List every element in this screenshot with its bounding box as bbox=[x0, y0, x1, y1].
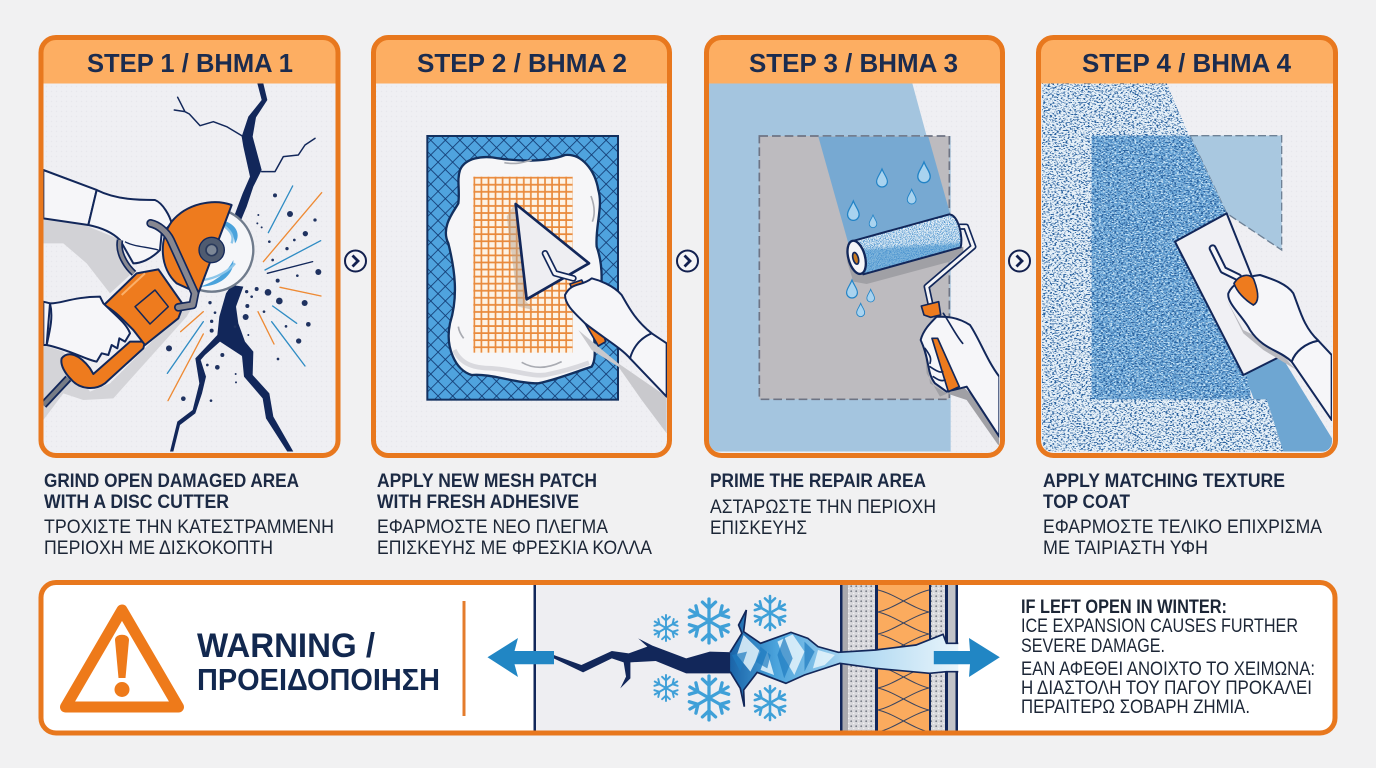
wall cross-section bbox=[840, 584, 958, 732]
caption: step 3 bbox=[710, 471, 936, 539]
caption: step 3: ΕΠΙΣΚΕΥΗΣ bbox=[710, 517, 807, 539]
hatched blue mesh patch bbox=[427, 136, 618, 400]
crack bbox=[170, 83, 315, 452]
step 3 heading: STEP 3 / BHMA 3 bbox=[749, 48, 958, 78]
caption: step 4: ΜΕ ΤΑΙΡΙΑΣΤΗ ΥΦΗ bbox=[1043, 537, 1208, 559]
warning heading: WARNING / bbox=[197, 627, 376, 665]
caption: step 2: APPLY NEW MESH PATCH bbox=[377, 471, 597, 492]
caption: step 1: ΠΕΡΙΟΧΗ ΜΕ ΔΙΣΚΟΚΟΠΤΗ bbox=[44, 537, 273, 559]
gloved hand and grip bbox=[921, 302, 999, 437]
white textured coat bbox=[1042, 83, 1283, 452]
grinder handle bbox=[61, 342, 145, 388]
arrow: step 1 to 2 bbox=[345, 250, 366, 272]
panel: warning bbox=[41, 582, 1335, 733]
panel: step 4 bbox=[1038, 38, 1336, 456]
arrow: step 2 to 3 bbox=[677, 250, 698, 272]
caption: step 3: ΑΣΤΑΡΩΣΤΕ ΤΗΝ ΠΕΡΙΟΧΗ bbox=[710, 496, 936, 518]
panel: step 2 bbox=[374, 38, 670, 456]
panel: step 3 bbox=[706, 38, 1002, 456]
step 4 frame bbox=[1038, 38, 1336, 456]
illustration: mesh patch and trowel bbox=[427, 136, 667, 433]
grinder body bbox=[104, 269, 183, 345]
step 1 heading: STEP 1 / BHMA 1 bbox=[87, 48, 293, 78]
panel: step 1 bbox=[41, 38, 338, 456]
sparks and debris bbox=[166, 186, 322, 402]
caption: step 1 bbox=[44, 471, 334, 559]
caption: step 4: ΕΦΑΡΜΟΣΤΕ ΤΕΛΙΚΟ ΕΠΙΧΡΙΣΜΑ bbox=[1043, 516, 1322, 538]
warning text bbox=[1021, 597, 1315, 718]
caption: step 1: WITH A DISC CUTTER bbox=[44, 492, 229, 513]
step 2 header bar bbox=[374, 38, 670, 84]
warning text: ΕΑΝ ΑΦΕΘΕΙ ΑΝΟΙΧΤΟ ΤΟ ΧΕΙΜΩΝΑ: bbox=[1021, 658, 1315, 680]
shadows bbox=[44, 220, 130, 294]
step 1 frame bbox=[41, 38, 338, 456]
step 2 heading: STEP 2 / BHMA 2 bbox=[417, 48, 627, 78]
frost diagram background bbox=[535, 584, 841, 732]
roller sleeve bbox=[844, 213, 963, 276]
adhesive blob bbox=[446, 155, 602, 383]
illustration: textured top coat with float bbox=[1042, 83, 1332, 452]
step 4 header bar bbox=[1038, 38, 1336, 84]
primer drops bbox=[847, 162, 930, 317]
grinder rear grip bbox=[120, 240, 134, 273]
icon: warning triangle bbox=[66, 610, 178, 707]
snowflakes bbox=[653, 596, 787, 720]
frozen crack bbox=[554, 610, 958, 707]
step 3 header bar bbox=[706, 38, 1002, 84]
caption: step 3: PRIME THE REPAIR AREA bbox=[710, 471, 926, 492]
arrow: step 3 to 4 bbox=[1009, 250, 1030, 272]
warning text: SEVERE DAMAGE. bbox=[1021, 635, 1165, 657]
gloved hand bbox=[565, 278, 667, 397]
upper hand bbox=[43, 170, 172, 263]
trowel bbox=[516, 204, 589, 299]
step 4 heading: STEP 4 / BHMA 4 bbox=[1082, 48, 1292, 78]
caption: step 4 bbox=[1043, 471, 1322, 559]
hand shadow bbox=[578, 330, 667, 433]
caption: step 2 bbox=[377, 471, 652, 559]
pale primed rectangle bbox=[1190, 136, 1282, 250]
grinder bar bbox=[151, 223, 195, 307]
shadow bbox=[1227, 300, 1332, 420]
divider bbox=[462, 601, 466, 716]
float trowel bbox=[1175, 213, 1283, 375]
trowel handle bbox=[570, 280, 606, 346]
caption: step 2: ΕΠΙΣΚΕΥΗΣ ΜΕ ΦΡΕΣΚΙΑ ΚΟΛΛΑ bbox=[377, 537, 652, 559]
darker textured repair area bbox=[1092, 136, 1252, 399]
float handle bbox=[1234, 275, 1258, 305]
warning text: IF LEFT OPEN IN WINTER: bbox=[1021, 597, 1227, 618]
caption: step 2: ΕΦΑΡΜΟΣΤΕ ΝΕΟ ΠΛΕΓΜΑ bbox=[377, 516, 608, 538]
primed wall area bbox=[709, 83, 951, 452]
caption: step 1: GRIND OPEN DAMAGED AREA bbox=[44, 471, 299, 492]
illustration: priming with roller bbox=[709, 83, 999, 452]
grinder disc bbox=[200, 212, 254, 293]
roller frame bbox=[927, 227, 973, 305]
arrow: expansion left bbox=[488, 638, 554, 677]
warning text: Η ΔΙΑΣΤΟΛΗ ΤΟΥ ΠΑΓΟΥ ΠΡΟΚΑΛΕΙ bbox=[1021, 677, 1312, 699]
caption: step 2: WITH FRESH ADHESIVE bbox=[377, 492, 579, 513]
arrow: expansion right bbox=[934, 638, 1000, 677]
warning text: ΠΕΡΑΙΤΕΡΩ ΣΟΒΑΡΗ ΖΗΜΙΑ. bbox=[1021, 696, 1250, 718]
warning text: ICE EXPANSION CAUSES FURTHER bbox=[1021, 615, 1298, 637]
freshly primed strip bbox=[818, 137, 950, 243]
caption: step 4: APPLY MATCHING TEXTURE bbox=[1043, 471, 1285, 492]
bare blue strip bbox=[1243, 357, 1332, 452]
disc guard bbox=[163, 202, 232, 293]
step 1 header bar bbox=[41, 38, 338, 84]
warning heading bbox=[197, 627, 440, 697]
gloved hand bbox=[1228, 275, 1332, 420]
orange mesh bbox=[473, 177, 573, 353]
caption: step 1: ΤΡΟΧΙΣΤΕ ΤΗΝ ΚΑΤΕΣΤΡΑΜΜΕΝΗ bbox=[44, 516, 334, 538]
grey repair rectangle bbox=[759, 136, 949, 399]
illustration: disc cutter grinding a crack bbox=[43, 83, 322, 452]
warning heading: ΠΡΟΕΙΔΟΠΟΙΗΣΗ bbox=[197, 662, 440, 697]
warning frame bbox=[41, 582, 1335, 733]
step 3 frame bbox=[706, 38, 1002, 456]
pale flecks inside repair area bbox=[1092, 136, 1252, 399]
cord bbox=[43, 378, 68, 405]
frost diagram left edge bbox=[534, 584, 536, 732]
lower hand bbox=[43, 297, 130, 362]
dark texture flecks bbox=[1042, 83, 1283, 452]
hub bbox=[199, 237, 224, 263]
caption: step 4: TOP COAT bbox=[1043, 492, 1130, 513]
step 2 frame bbox=[374, 38, 670, 456]
shadows bbox=[847, 247, 999, 447]
